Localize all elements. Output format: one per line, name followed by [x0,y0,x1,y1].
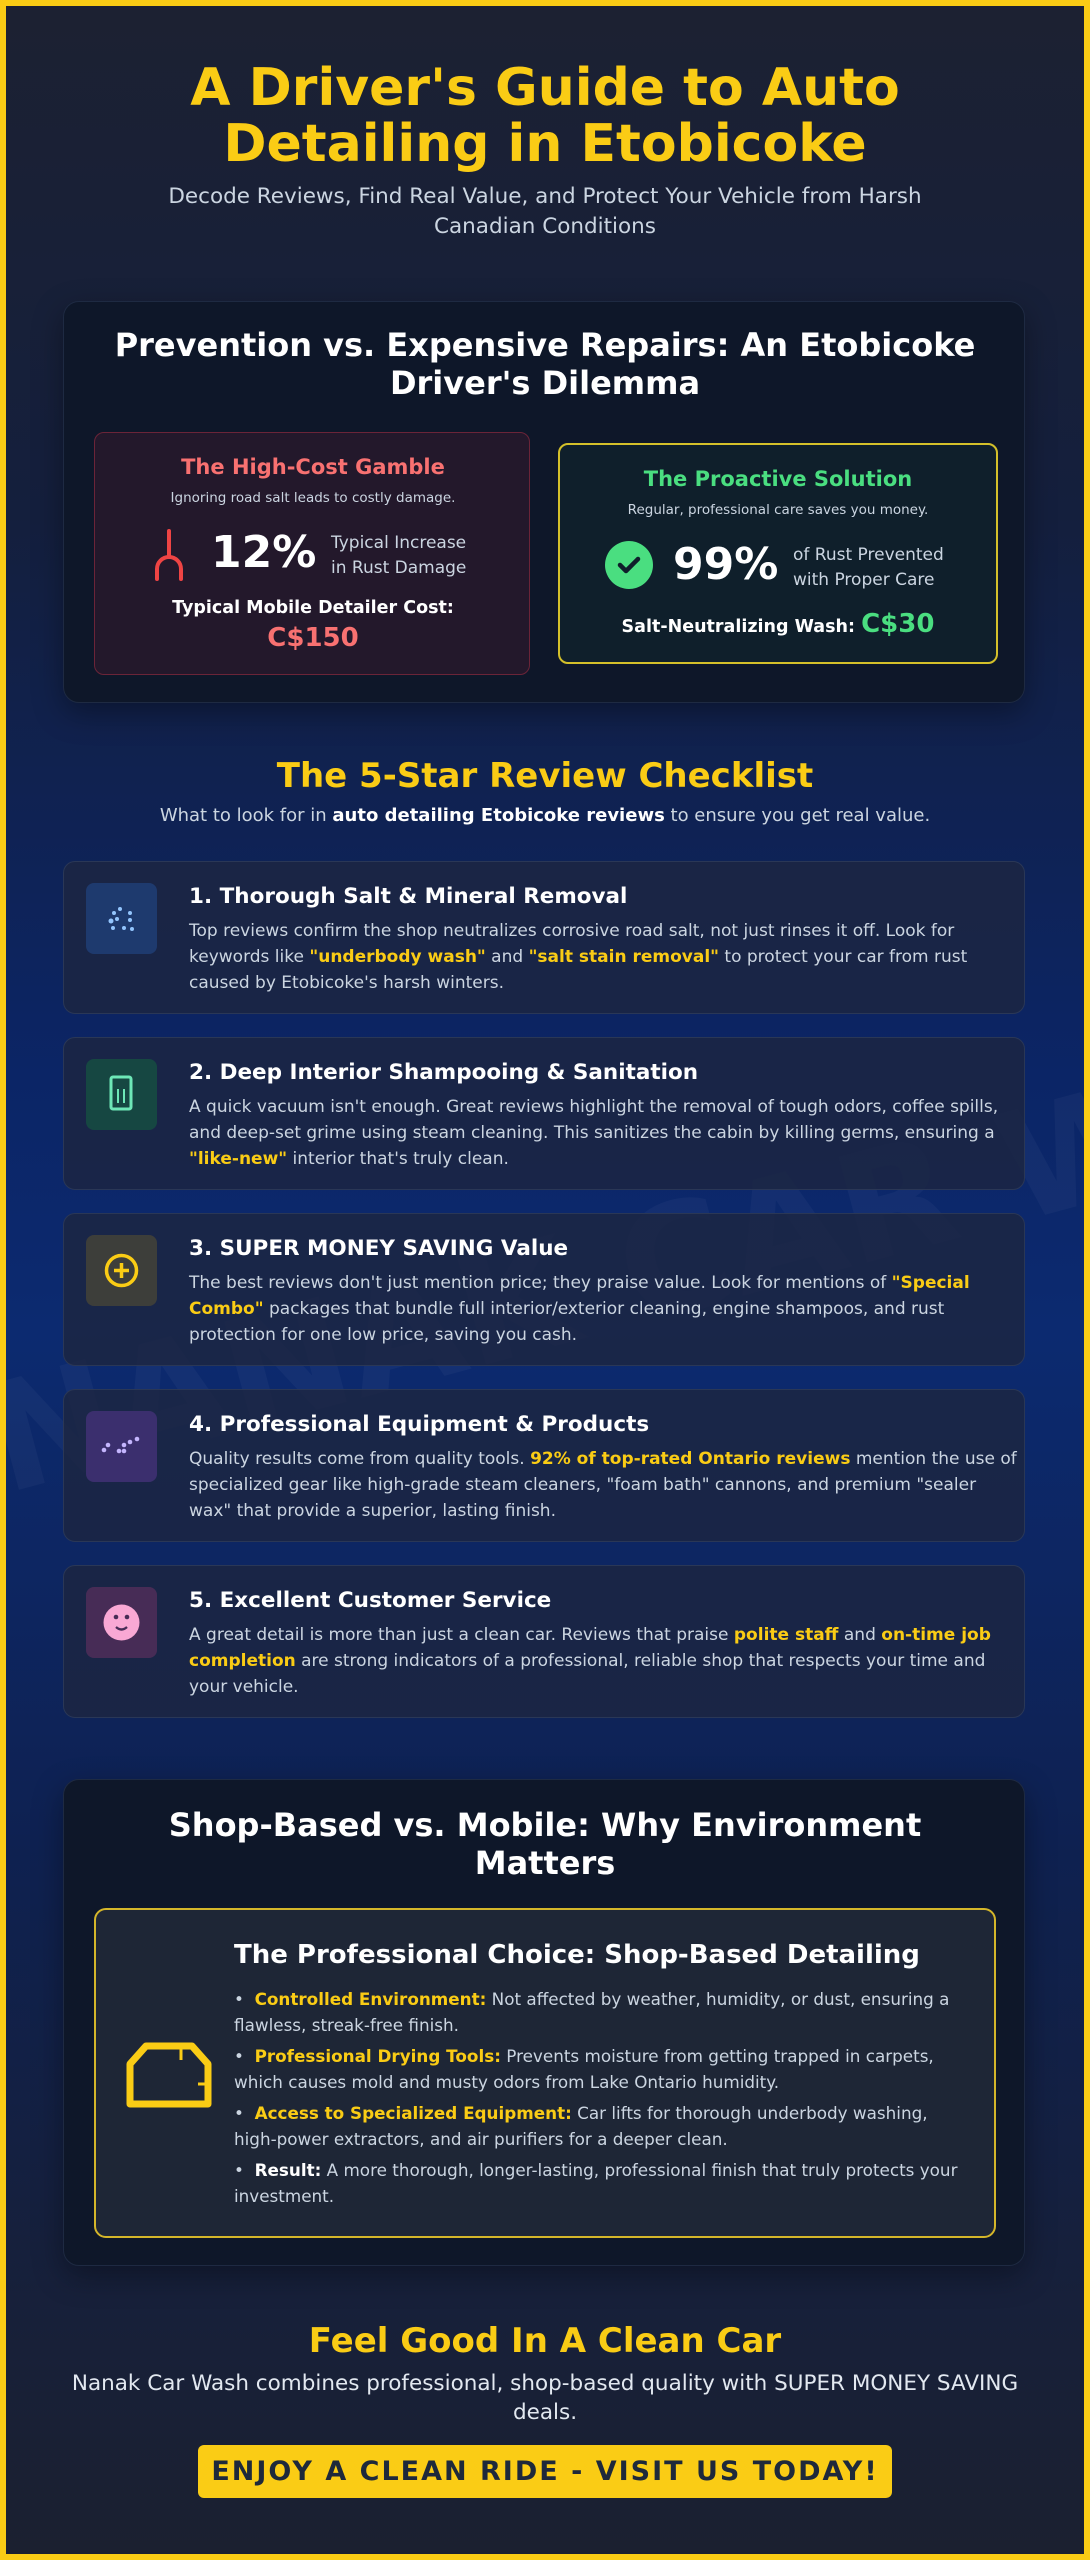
title: 3. SUPER MONEY SAVING Value [189,1236,568,1261]
card title: The High-Cost Gamble [181,455,445,479]
CTA button [198,2445,892,2498]
icon: smiley [86,1587,157,1658]
body: A quick vacuum isn't enough. Great reviews highlight the removal of tough odors, coffee spills, and deep-set grime using steam cleaning. This sanitizes the cabin by killing germs, ensuring a "like-new" interior that's truly clean. [189,1097,998,1169]
bullet list: • Result: A more thorough, longer-lasting, professional finish that truly protects your investment. [234,2160,957,2206]
card title: The Proactive Solution [644,467,912,491]
stat row [155,527,466,581]
panel heading: Shop-Based vs. Mobile: Why Environment [169,1806,921,1844]
card: proactive solution [558,443,998,664]
section heading: checklist: The 5-Star Review Checklist [277,756,813,796]
subtitle: Decode Reviews, Find Real Value, and Protect Your Vehicle from Harsh Canadian Conditions [168,184,922,239]
card 2 [63,1037,1025,1190]
title: 5. Excellent Customer Service [189,1588,551,1613]
card 3 [63,1213,1025,1366]
body: A great detail is more than just a clean car. Reviews that praise polite staff and on-time job completion are strong indicators of a professional, reliable shop that respects your time and your vehicle. [189,1625,991,1697]
callout: professional choice [94,1908,996,2238]
card 5 [63,1565,1025,1718]
icon: garage [126,2042,212,2108]
footer text: Nanak Car Wash combines professional, shop-based quality with SUPER MONEY SAVING deals. [72,2371,1018,2425]
bullet list: • Controlled Environment: Not affected by weather, humidity, or dust, ensuring a flawless, streak-free finish. [234,1989,949,2035]
title: 2. Deep Interior Shampooing & Sanitation [189,1060,698,1085]
title [190,58,900,174]
card 4 [63,1389,1025,1542]
panel: prevention vs repairs [63,301,1025,703]
stat row: in Rust Damage [331,558,466,578]
icon: rust [155,529,183,581]
price: Salt-Neutralizing Wash: C$30 [622,609,934,639]
card subtitle: Regular, professional care saves you money. [628,502,928,518]
callout heading: The Professional Choice: Shop-Based Detailing [234,1940,920,1970]
section subtext: What to look for in auto detailing Etobicoke reviews to ensure you get real value. [160,805,930,826]
title: 4. Professional Equipment & Products [189,1412,649,1437]
icon: check [605,541,653,589]
title: 1. Thorough Salt & Mineral Removal [189,884,627,909]
stat row: with Proper Care [793,570,934,590]
bullet list [234,1989,958,2206]
icon: shampoo [86,1059,157,1130]
footer heading: Feel Good In A Clean Car [309,2321,781,2361]
cost: Typical Mobile Detailer Cost: [172,598,454,618]
stat row: Typical Increase [331,533,466,553]
bullet list: • Access to Specialized Equipment: Car lifts for thorough underbody washing, high-power extractors, and air purifiers for a deeper clean. [234,2103,928,2149]
card: high-cost gamble [94,432,530,675]
panel heading: Matters [475,1844,615,1882]
stat row [605,539,944,590]
title: A Driver's Guide to Auto [190,58,900,118]
panel: shop-based vs mobile [63,1779,1025,2266]
bullet list: • Professional Drying Tools: Prevents moisture from getting trapped in carpets, which causes mold and musty odors from Lake Ontario humidity. [234,2046,934,2092]
stat 99%: 99% [673,539,778,590]
stat 12%: 12% [211,527,316,578]
icon: equipment [86,1411,157,1482]
body: Quality results come from quality tools. 92% of top-rated Ontario reviews mention the use of specialized gear like high-grade steam cleaners, "foam bath" cannons, and premium "sealer wax" that provide a superior, lasting finish. [189,1449,1017,1521]
panel heading: Driver's Dilemma [390,364,700,402]
card subtitle: Ignoring road salt leads to costly damage. [171,490,455,506]
card 1 [63,861,1025,1014]
stat row: of Rust Prevented [793,545,944,565]
icon: coin plus [86,1235,157,1306]
title: Detailing in Etobicoke [223,114,867,174]
body: The best reviews don't just mention price; they praise value. Look for mentions of "Special Combo" packages that bundle full interior/exterior cleaning, engine shampoos, and rust protection for one low price, saving you cash. [189,1273,970,1345]
panel heading: Prevention vs. Expensive Repairs: An Etobicoke [115,326,975,364]
body: Top reviews confirm the shop neutralizes corrosive road salt, not just rinses it off. Look for keywords like "underbody wash" and "salt stain removal" to protect your car from rust caused by Etobicoke's harsh winters. [189,921,967,993]
card: high-cost gamble: C$150 [267,623,359,653]
panel heading [115,326,975,402]
panel heading [169,1806,921,1882]
icon: salt [86,883,157,954]
CTA button: ENJOY A CLEAN RIDE - VISIT US TODAY! [211,2456,879,2487]
